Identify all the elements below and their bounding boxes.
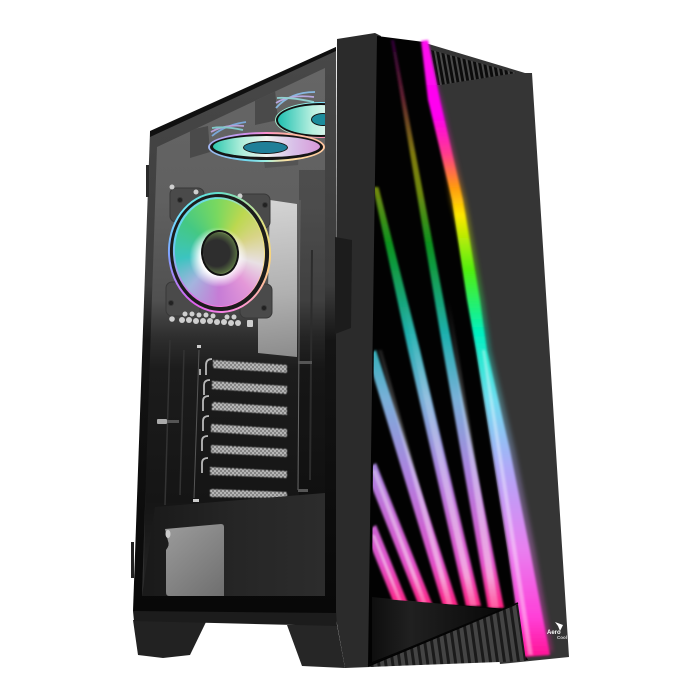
glossy black front panel <box>368 36 528 667</box>
top edge of the glass <box>150 47 336 137</box>
right side face <box>422 42 569 664</box>
PSU shroud <box>142 493 325 596</box>
stacked fan edges <box>211 92 315 136</box>
expansion slot perforations <box>210 360 287 498</box>
rear handle port <box>335 237 352 334</box>
illustration: PC case body <box>131 33 569 668</box>
ridged bottom panel <box>368 603 526 667</box>
right cable bay <box>298 170 325 492</box>
top fan mounts <box>190 90 300 168</box>
fan frame <box>166 188 272 318</box>
Aerocool logo: Cool <box>557 635 567 640</box>
front column <box>335 33 381 668</box>
fan infinity mirror <box>199 228 240 277</box>
left hinge tab bottom <box>131 542 134 578</box>
left foot <box>133 620 206 658</box>
fan blades <box>171 196 267 309</box>
base strip <box>133 611 337 626</box>
fan dark ring <box>166 191 273 314</box>
top vent grille <box>431 50 516 85</box>
light stripes on front panel <box>365 40 504 608</box>
fan inner glow ring <box>169 194 269 310</box>
Aerocool logo <box>547 622 567 640</box>
expansion slot hooks <box>193 345 212 502</box>
fan: large RGB rear fan <box>164 189 275 316</box>
glass side panel frame <box>133 47 336 613</box>
Aerocool logo: Aero <box>547 630 561 636</box>
honeycomb vents <box>169 184 253 327</box>
main rainbow light bar <box>421 40 553 657</box>
standoff <box>157 419 179 424</box>
left hinge tab top <box>146 165 149 197</box>
lower front wedge <box>372 597 505 662</box>
right foot <box>287 625 345 668</box>
PSU window <box>165 524 224 596</box>
glass interior <box>142 68 325 596</box>
motherboard cooler plate <box>258 200 297 357</box>
left cable tray lines <box>142 343 184 594</box>
fan white hub glow <box>187 225 249 289</box>
interior components <box>142 90 325 596</box>
fan: rear-top RGB fan <box>275 102 325 138</box>
fan: front-top RGB fan <box>208 132 325 162</box>
